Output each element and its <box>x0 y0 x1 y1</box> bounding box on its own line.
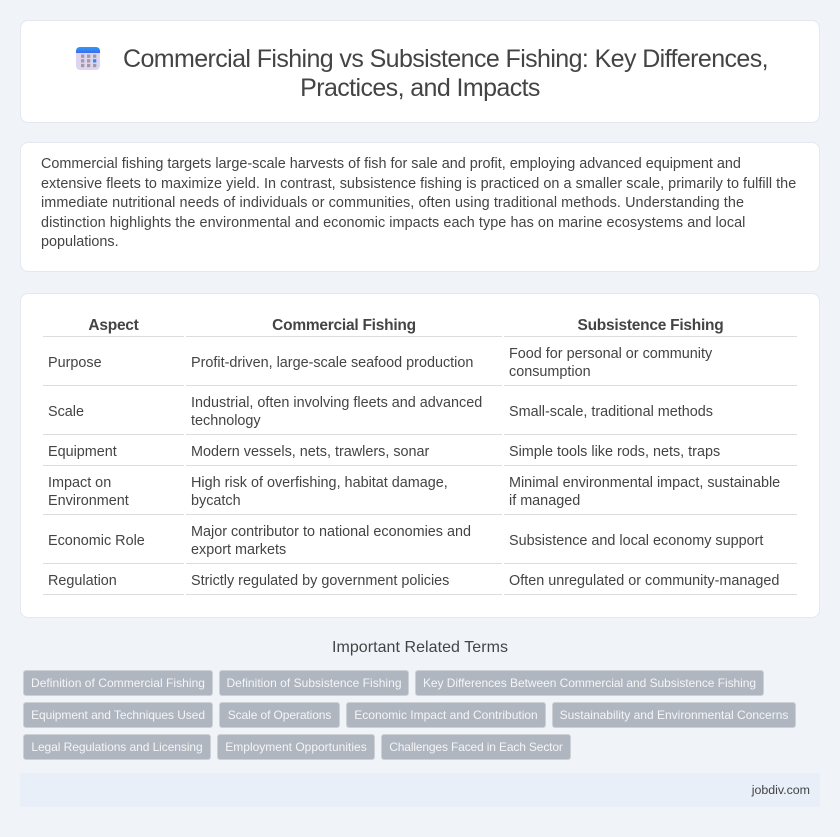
comparison table: Subsistence Fishing <box>578 317 723 334</box>
comparison table: Impact on <box>48 475 111 491</box>
comparison table: Commercial Fishing <box>272 317 416 334</box>
panel: comparison table <box>20 293 820 618</box>
heading: important related terms: Important Related Terms <box>332 639 508 656</box>
comparison table: Industrial, often involving fleets and advanced <box>191 395 482 411</box>
comparison table: Simple tools like rods, nets, traps <box>509 444 720 460</box>
comparison table: Scale <box>48 404 84 420</box>
text block: introduction <box>41 156 796 250</box>
related terms tags: Equipment and Techniques Used <box>31 708 205 722</box>
related terms tags: Legal Regulations and Licensing <box>31 740 203 754</box>
related terms tags: Challenges Faced in Each Sector <box>389 740 563 754</box>
comparison table: Equipment <box>48 444 117 460</box>
text block: introduction: distinction highlights the environmental and economic impacts each type has on marine ecosystems and local <box>41 214 745 230</box>
icon: calendar <box>76 47 100 70</box>
title: Practices, and Impacts <box>300 74 540 102</box>
footer bar: jobdiv.com <box>752 783 810 797</box>
comparison table: Modern vessels, nets, trawlers, sonar <box>191 444 429 460</box>
title <box>123 45 768 102</box>
comparison table: Aspect <box>88 317 139 334</box>
text block: introduction: immediate nutritional needs of individuals or communities, often using traditional methods. Understanding the <box>41 195 744 211</box>
comparison table: technology <box>191 413 261 429</box>
text block: introduction: populations. <box>41 234 119 250</box>
panel: title header <box>20 20 820 123</box>
comparison table: if managed <box>509 493 580 509</box>
related terms tags: Employment Opportunities <box>225 740 367 754</box>
comparison table: Strictly regulated by government policies <box>191 573 449 589</box>
related terms tags <box>23 670 796 760</box>
comparison table: Regulation <box>48 573 117 589</box>
comparison table <box>43 317 797 595</box>
related terms tags: Key Differences Between Commercial and Subsistence Fishing <box>423 676 756 690</box>
comparison table: Profit-driven, large-scale seafood production <box>191 355 473 371</box>
comparison table: Major contributor to national economies and <box>191 524 471 540</box>
title: Commercial Fishing vs Subsistence Fishing: Key Differences, <box>123 45 768 73</box>
text block: introduction: Commercial fishing targets large-scale harvests of fish for sale and profit, employing advanced equipment and <box>41 156 741 172</box>
comparison table: Purpose <box>48 355 102 371</box>
comparison table: Economic Role <box>48 533 145 549</box>
comparison table: consumption <box>509 364 591 380</box>
comparison table: Subsistence and local economy support <box>509 533 763 549</box>
related terms tags: Definition of Subsistence Fishing <box>226 676 402 690</box>
comparison table: bycatch <box>191 493 241 509</box>
comparison table: Minimal environmental impact, sustainable <box>509 475 780 491</box>
comparison table: export markets <box>191 542 286 558</box>
related terms tags: Sustainability and Environmental Concerns <box>560 708 788 722</box>
comparison table: Small-scale, traditional methods <box>509 404 713 420</box>
comparison table: Environment <box>48 493 129 509</box>
panel: introduction <box>20 142 820 272</box>
comparison table: Often unregulated or community-managed <box>509 573 779 589</box>
footer bar <box>20 773 820 807</box>
related terms tags: Economic Impact and Contribution <box>354 708 538 722</box>
related terms tags: Definition of Commercial Fishing <box>31 676 205 690</box>
comparison table: High risk of overfishing, habitat damage, <box>191 475 448 491</box>
related terms tags: Scale of Operations <box>228 708 331 722</box>
text block: introduction: extensive fleets to maximize yield. In contrast, subsistence fishing is practiced on a smaller scale, primarily to fulfill the <box>41 176 796 192</box>
comparison table: Food for personal or community <box>509 346 712 362</box>
